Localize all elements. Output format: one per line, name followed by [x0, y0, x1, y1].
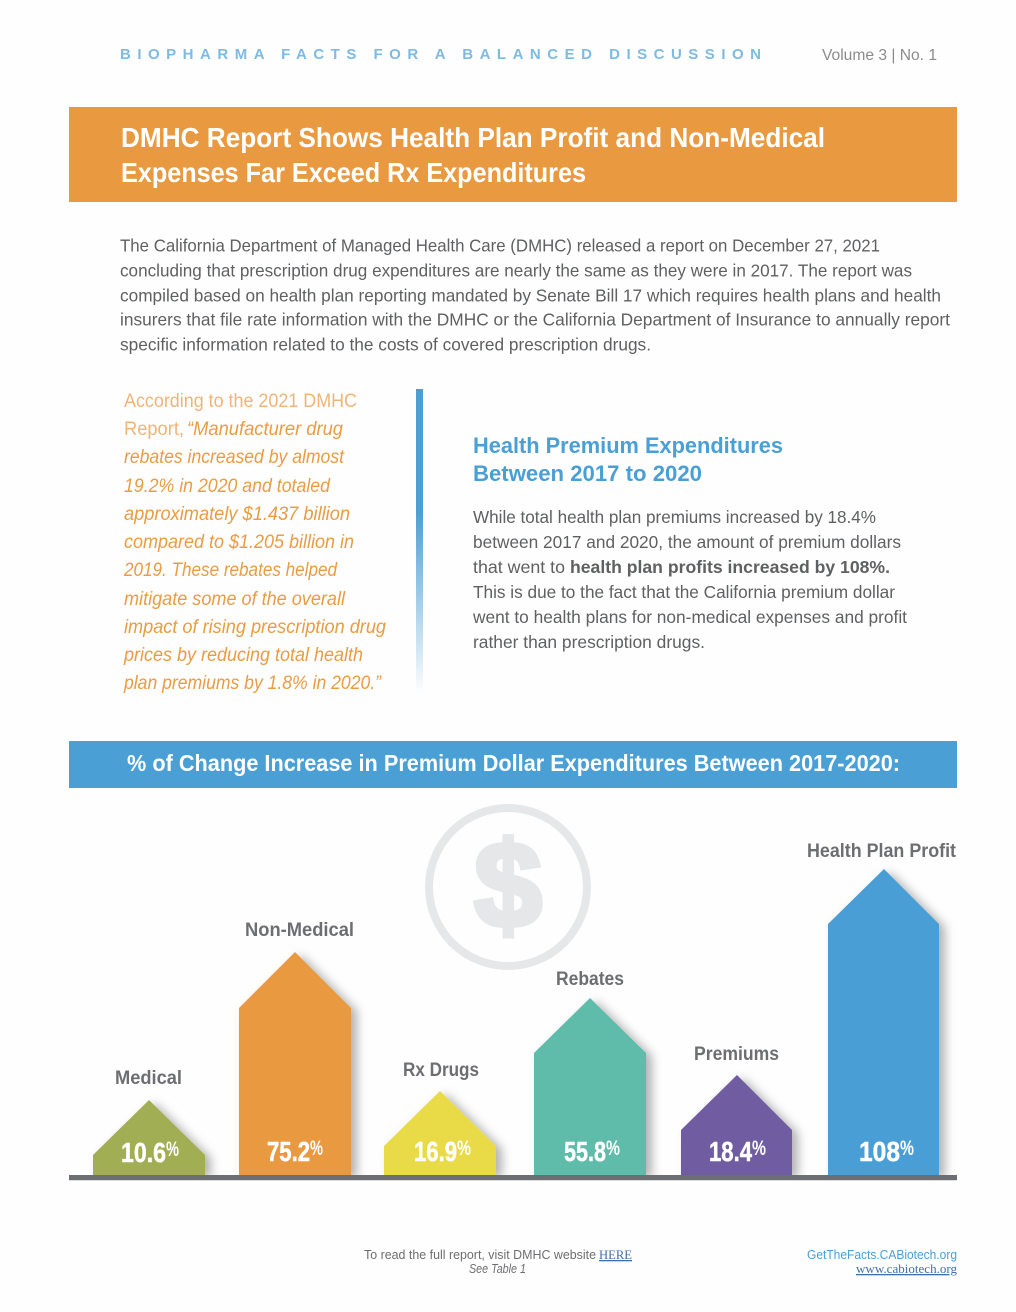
section paragraph: While total health plan premiums increased by 18.4% — [473, 507, 876, 527]
footer note: HERE — [599, 1247, 632, 1262]
pull quote: 2019. These rebates helped — [123, 559, 338, 581]
icon: dollar coin watermark: $ — [474, 817, 542, 953]
bar: Health Plan Profit: 108 — [859, 1136, 900, 1167]
bar: Medical: % — [166, 1138, 179, 1161]
bar: Rebates: % — [606, 1137, 620, 1160]
pull quote: According to the 2021 DMHC — [124, 390, 357, 412]
intro paragraph: concluding that prescription drug expenditures are nearly the same as they were in 2017. The report was — [120, 260, 912, 280]
footer links: GetTheFacts.CABiotech.org — [807, 1247, 957, 1262]
bar: Medical: Medical — [115, 1068, 182, 1089]
bar: Medical — [93, 1068, 205, 1175]
chart baseline — [69, 1175, 957, 1181]
section heading — [473, 433, 783, 486]
intro paragraph: specific information related to the costs of covered prescription drugs. — [120, 334, 651, 354]
bar: Health Plan Profit: % — [900, 1137, 914, 1160]
bar: Non-Medical: % — [310, 1137, 323, 1160]
pull quote — [123, 390, 386, 694]
bar: Medical: 10.6 — [121, 1137, 166, 1168]
intro paragraph: compiled based on health plan reporting mandated by Senate Bill 17 which requires health plans and health — [120, 286, 941, 306]
pull quote: impact of rising prescription drug — [124, 616, 386, 638]
section paragraph: between 2017 and 2020, the amount of premium dollars — [473, 532, 901, 552]
footer note — [364, 1247, 632, 1276]
header tagline: BIOPHARMA FACTS FOR A BALANCED DISCUSSION — [120, 46, 761, 63]
pull quote: Report, — [124, 418, 184, 440]
bar: Non-Medical — [239, 920, 354, 1175]
pull quote: plan premiums by 1.8% in 2020.” — [123, 672, 382, 694]
chart heading band — [69, 741, 957, 788]
bar: Rx Drugs: 16.9 — [414, 1136, 457, 1167]
section heading: Between 2017 to 2020 — [473, 461, 702, 486]
bar: Non-Medical: 75.2 — [267, 1136, 310, 1167]
bar: Rebates: 55.8 — [564, 1136, 606, 1167]
vertical divider — [416, 389, 423, 694]
section paragraph — [472, 507, 907, 652]
volume and issue: Volume 3 | No. 1 — [822, 47, 937, 64]
footer links — [807, 1247, 958, 1276]
bar: Rebates — [534, 969, 646, 1175]
title banner: Expenses Far Exceed Rx Expenditures — [121, 157, 586, 188]
bar: Premiums — [681, 1044, 792, 1175]
pull quote: rebates increased by almost — [124, 446, 345, 468]
footer note: To read the full report, visit DMHC website — [364, 1247, 596, 1262]
pull quote: approximately $1.437 billion — [124, 503, 350, 525]
bar: Health Plan Profit — [807, 841, 957, 1175]
bar: Non-Medical: Non-Medical — [245, 920, 354, 941]
section paragraph: health plan profits increased by 108%. — [570, 557, 890, 577]
chart heading band: % of Change Increase in Premium Dollar Expenditures Between 2017-2020: — [127, 750, 900, 776]
bar: Premiums: Premiums — [694, 1044, 779, 1065]
section paragraph: that went to — [473, 557, 565, 577]
title banner: DMHC Report Shows Health Plan Profit and Non-Medical — [121, 122, 825, 153]
bar: Rx Drugs: % — [457, 1137, 471, 1160]
intro paragraph: insurers that file rate information with the DMHC or the California Department of Insurance to annually report — [120, 310, 950, 330]
footer note: See Table 1 — [469, 1261, 526, 1276]
title banner — [69, 107, 957, 202]
bar: Rebates: Rebates — [556, 969, 624, 990]
bar: Premiums: 18.4 — [709, 1136, 752, 1167]
section heading: Health Premium Expenditures — [473, 433, 783, 458]
pull quote: compared to $1.205 billion in — [124, 531, 354, 553]
section paragraph: rather than prescription drugs. — [473, 632, 705, 652]
icon: dollar coin watermark — [429, 808, 587, 966]
pull quote: 19.2% in 2020 and totaled — [124, 475, 331, 497]
section paragraph: went to health plans for non-medical expenses and profit — [472, 607, 907, 627]
bar: Rx Drugs — [384, 1060, 496, 1175]
intro paragraph — [120, 236, 950, 354]
bar: Health Plan Profit: Health Plan Profit — [807, 841, 957, 862]
pull quote: prices by reducing total health — [123, 644, 363, 666]
footer links: www.cabiotech.org — [856, 1261, 958, 1276]
intro paragraph: The California Department of Managed Health Care (DMHC) released a report on December 27, 2021 — [120, 236, 880, 256]
section paragraph: This is due to the fact that the California premium dollar — [473, 582, 895, 602]
pull quote: mitigate some of the overall — [124, 588, 346, 610]
pull quote: “Manufacturer drug — [187, 418, 343, 440]
bar: Premiums: % — [752, 1137, 766, 1160]
bar: Rx Drugs: Rx Drugs — [403, 1060, 479, 1081]
